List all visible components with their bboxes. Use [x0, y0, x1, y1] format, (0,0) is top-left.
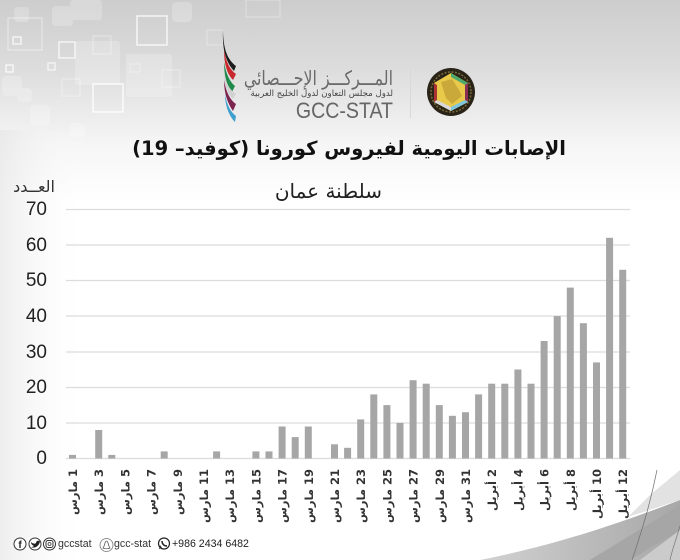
- decorative corner: [480, 470, 680, 560]
- icon: GCC emblem: [427, 68, 475, 116]
- x axis labels: 5 مارس: [118, 469, 132, 515]
- x axis labels: [66, 469, 630, 523]
- x axis labels: 2 أبريل: [484, 469, 499, 511]
- logo: GCC-STAT wordmark: GCC-STAT: [296, 99, 393, 123]
- icon: instagram: [44, 538, 56, 550]
- y axis labels: 60: [26, 235, 47, 256]
- x axis labels: 19 مارس: [302, 469, 316, 523]
- icon: twitter: [29, 538, 41, 550]
- bar chart: [26, 199, 630, 469]
- bars: [69, 238, 626, 458]
- x axis labels: 10 أبريل: [589, 469, 604, 519]
- logo: Arabic name: المـــركـــز الإحـــصائي: [244, 67, 393, 91]
- x axis labels: 11 مارس: [197, 469, 211, 523]
- y axis labels: [26, 199, 47, 469]
- divider: [410, 68, 411, 118]
- x axis labels: 1 مارس: [66, 469, 80, 515]
- x axis labels: 8 أبريل: [563, 469, 578, 511]
- icon: snapchat: [100, 538, 113, 552]
- y axis grid lines: [66, 210, 630, 458]
- icon: facebook: [14, 538, 26, 551]
- x axis labels: 25 مارس: [380, 469, 394, 523]
- x axis labels: 15 مارس: [250, 469, 264, 523]
- y axis labels: 70: [26, 199, 47, 220]
- left edge shading: [0, 130, 90, 560]
- text: gcc-stat handle: gcc-stat: [114, 538, 151, 550]
- y axis labels: 50: [26, 270, 47, 291]
- x axis labels: 4 أبريل: [510, 469, 526, 511]
- x axis labels: 7 مارس: [144, 469, 158, 515]
- x axis labels: 6 أبريل: [536, 469, 552, 511]
- y axis labels: 30: [26, 342, 47, 363]
- social footer: [14, 538, 249, 552]
- y axis labels: 40: [26, 306, 47, 327]
- y axis labels: 20: [26, 377, 47, 398]
- x axis labels: 29 مارس: [433, 469, 447, 523]
- icon: whatsapp: [158, 538, 170, 549]
- x axis labels: 9 مارس: [171, 469, 185, 515]
- x axis labels: 12 أبريل: [615, 469, 630, 519]
- text: gccstat handle: gccstat: [58, 538, 92, 550]
- x axis labels: 17 مارس: [276, 469, 290, 523]
- title: الإصابات اليومية لفيروس كورونا (كوفيد– 19): [132, 137, 566, 160]
- logo: GCC-STAT: [223, 29, 393, 123]
- x axis labels: 27 مارس: [406, 469, 420, 523]
- x axis labels: 13 مارس: [223, 469, 237, 523]
- y axis title: العــدد: [13, 177, 55, 196]
- subtitle: سلطنة عمان: [275, 179, 382, 203]
- logo: Arabic subtitle: لدول مجلس التعاون لدول الخليج العربية: [250, 89, 393, 99]
- icon: facebook: f: [18, 540, 22, 551]
- logo: coloured ribbons: [223, 29, 236, 122]
- text: phone number: +986 2434 6482: [172, 538, 249, 550]
- x axis labels: 21 مارس: [328, 469, 342, 523]
- y axis labels: 0: [36, 448, 47, 469]
- x axis labels: 23 مارس: [354, 469, 368, 523]
- y axis labels: 10: [26, 413, 47, 434]
- decorative squares: [2, 0, 280, 137]
- x axis labels: 31 مارس: [459, 469, 473, 523]
- x axis labels: 3 مارس: [92, 469, 106, 515]
